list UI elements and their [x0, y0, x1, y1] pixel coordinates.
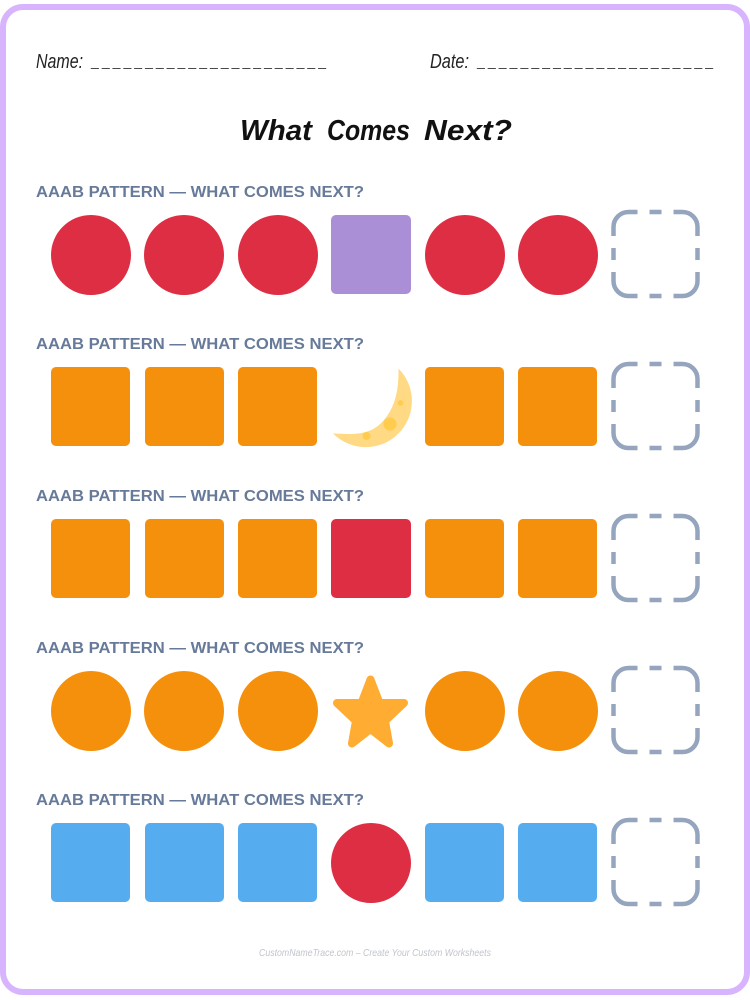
date field: [430, 51, 713, 73]
title: Next?: [424, 115, 512, 147]
row 2: orange squares and moon: [36, 336, 698, 448]
row 5 label: AAAB PATTERN — WHAT COMES NEXT?: [36, 792, 364, 809]
date field: ______________________: [476, 53, 713, 69]
name field: ______________________: [90, 53, 326, 69]
row 4: orange circles and star: [36, 640, 698, 752]
footer: CustomNameTrace.com – Create Your Custom Worksheets: [259, 947, 492, 959]
row 5 shapes: [51, 823, 597, 903]
row 3 shapes: [51, 519, 597, 598]
title: What: [240, 115, 313, 147]
row 3 answer box: [614, 516, 698, 600]
row 5: blue squares and red circle: [36, 792, 698, 904]
title: [240, 115, 512, 147]
row 1 label: AAAB PATTERN — WHAT COMES NEXT?: [36, 184, 364, 201]
row 3: orange squares and red square: [36, 488, 698, 600]
row 4 shapes: [51, 671, 598, 751]
name field: Name:: [36, 51, 83, 73]
row 1: red circles and purple square: [36, 184, 698, 296]
row 5 answer box: [614, 820, 698, 904]
date field: Date:: [430, 51, 469, 73]
row 4 answer box: [614, 668, 698, 752]
row 4 label: AAAB PATTERN — WHAT COMES NEXT?: [36, 640, 364, 657]
title: Comes: [327, 115, 410, 147]
row 1 shapes: [51, 215, 598, 295]
row 2 label: AAAB PATTERN — WHAT COMES NEXT?: [36, 336, 364, 353]
row 3 label: AAAB PATTERN — WHAT COMES NEXT?: [36, 488, 364, 505]
row 2 answer box: [614, 364, 698, 448]
row 1 answer box: [614, 212, 698, 296]
name field: [36, 51, 326, 73]
icon: star: [337, 680, 404, 744]
icon: crescent moon: [333, 368, 412, 447]
row 2 shapes: [51, 367, 597, 447]
